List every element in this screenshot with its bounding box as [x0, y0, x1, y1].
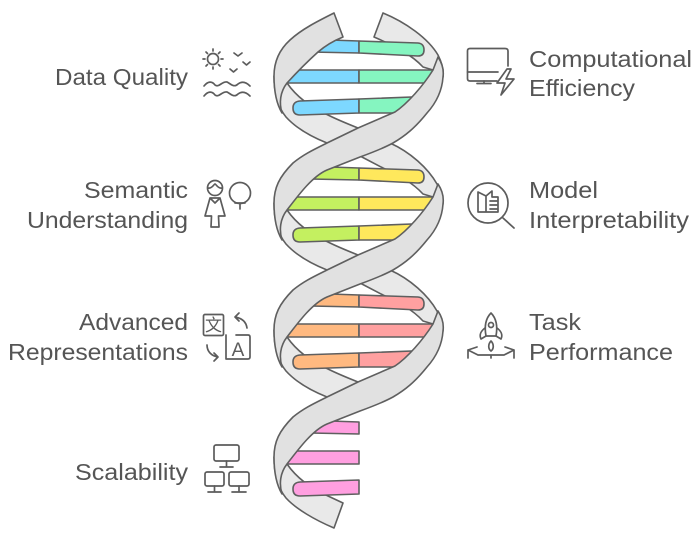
label: Semantic Understanding: Understanding [27, 207, 188, 233]
label: Advanced Representations [8, 309, 188, 365]
dna helix [274, 13, 443, 528]
label: Scalability: Scalability [75, 459, 189, 485]
rungs: lime and yellow [280, 167, 440, 242]
icon: translation: 文 [205, 316, 222, 335]
label: Semantic Understanding [27, 177, 188, 233]
icon: monitor with lightning bolt [468, 48, 514, 95]
label: Model Interpretability: Interpretability [529, 207, 690, 233]
label: Model Interpretability [529, 177, 690, 233]
icon: translation [204, 313, 250, 361]
icon: translation: A [232, 340, 245, 361]
rungs: magenta [280, 421, 359, 496]
icon: magnifier over book [468, 183, 514, 228]
label: Task Performance: Performance [529, 339, 673, 365]
label: Data Quality: Data Quality [55, 64, 189, 90]
label: Advanced Representations: Advanced [79, 309, 188, 335]
rungs: orange and pink [280, 294, 440, 369]
icon: networked computers [205, 445, 249, 492]
label: Computational Efficiency: Efficiency [529, 75, 636, 101]
label: Computational Efficiency [529, 46, 692, 101]
icon: sun, birds and waves [203, 49, 250, 96]
rungs: blue and green [280, 40, 440, 115]
label: Task Performance: Task [529, 309, 582, 335]
front strands [274, 13, 443, 494]
label: Model Interpretability: Model [529, 177, 598, 203]
label: Computational Efficiency: Computational [529, 46, 692, 72]
icon: person and light bulb [205, 180, 250, 227]
back strands [274, 13, 443, 528]
icon: rocket launch [468, 313, 514, 358]
label: Advanced Representations: Representations [8, 339, 188, 365]
label: Task Performance [529, 309, 673, 365]
label: Semantic Understanding: Semantic [84, 177, 188, 203]
